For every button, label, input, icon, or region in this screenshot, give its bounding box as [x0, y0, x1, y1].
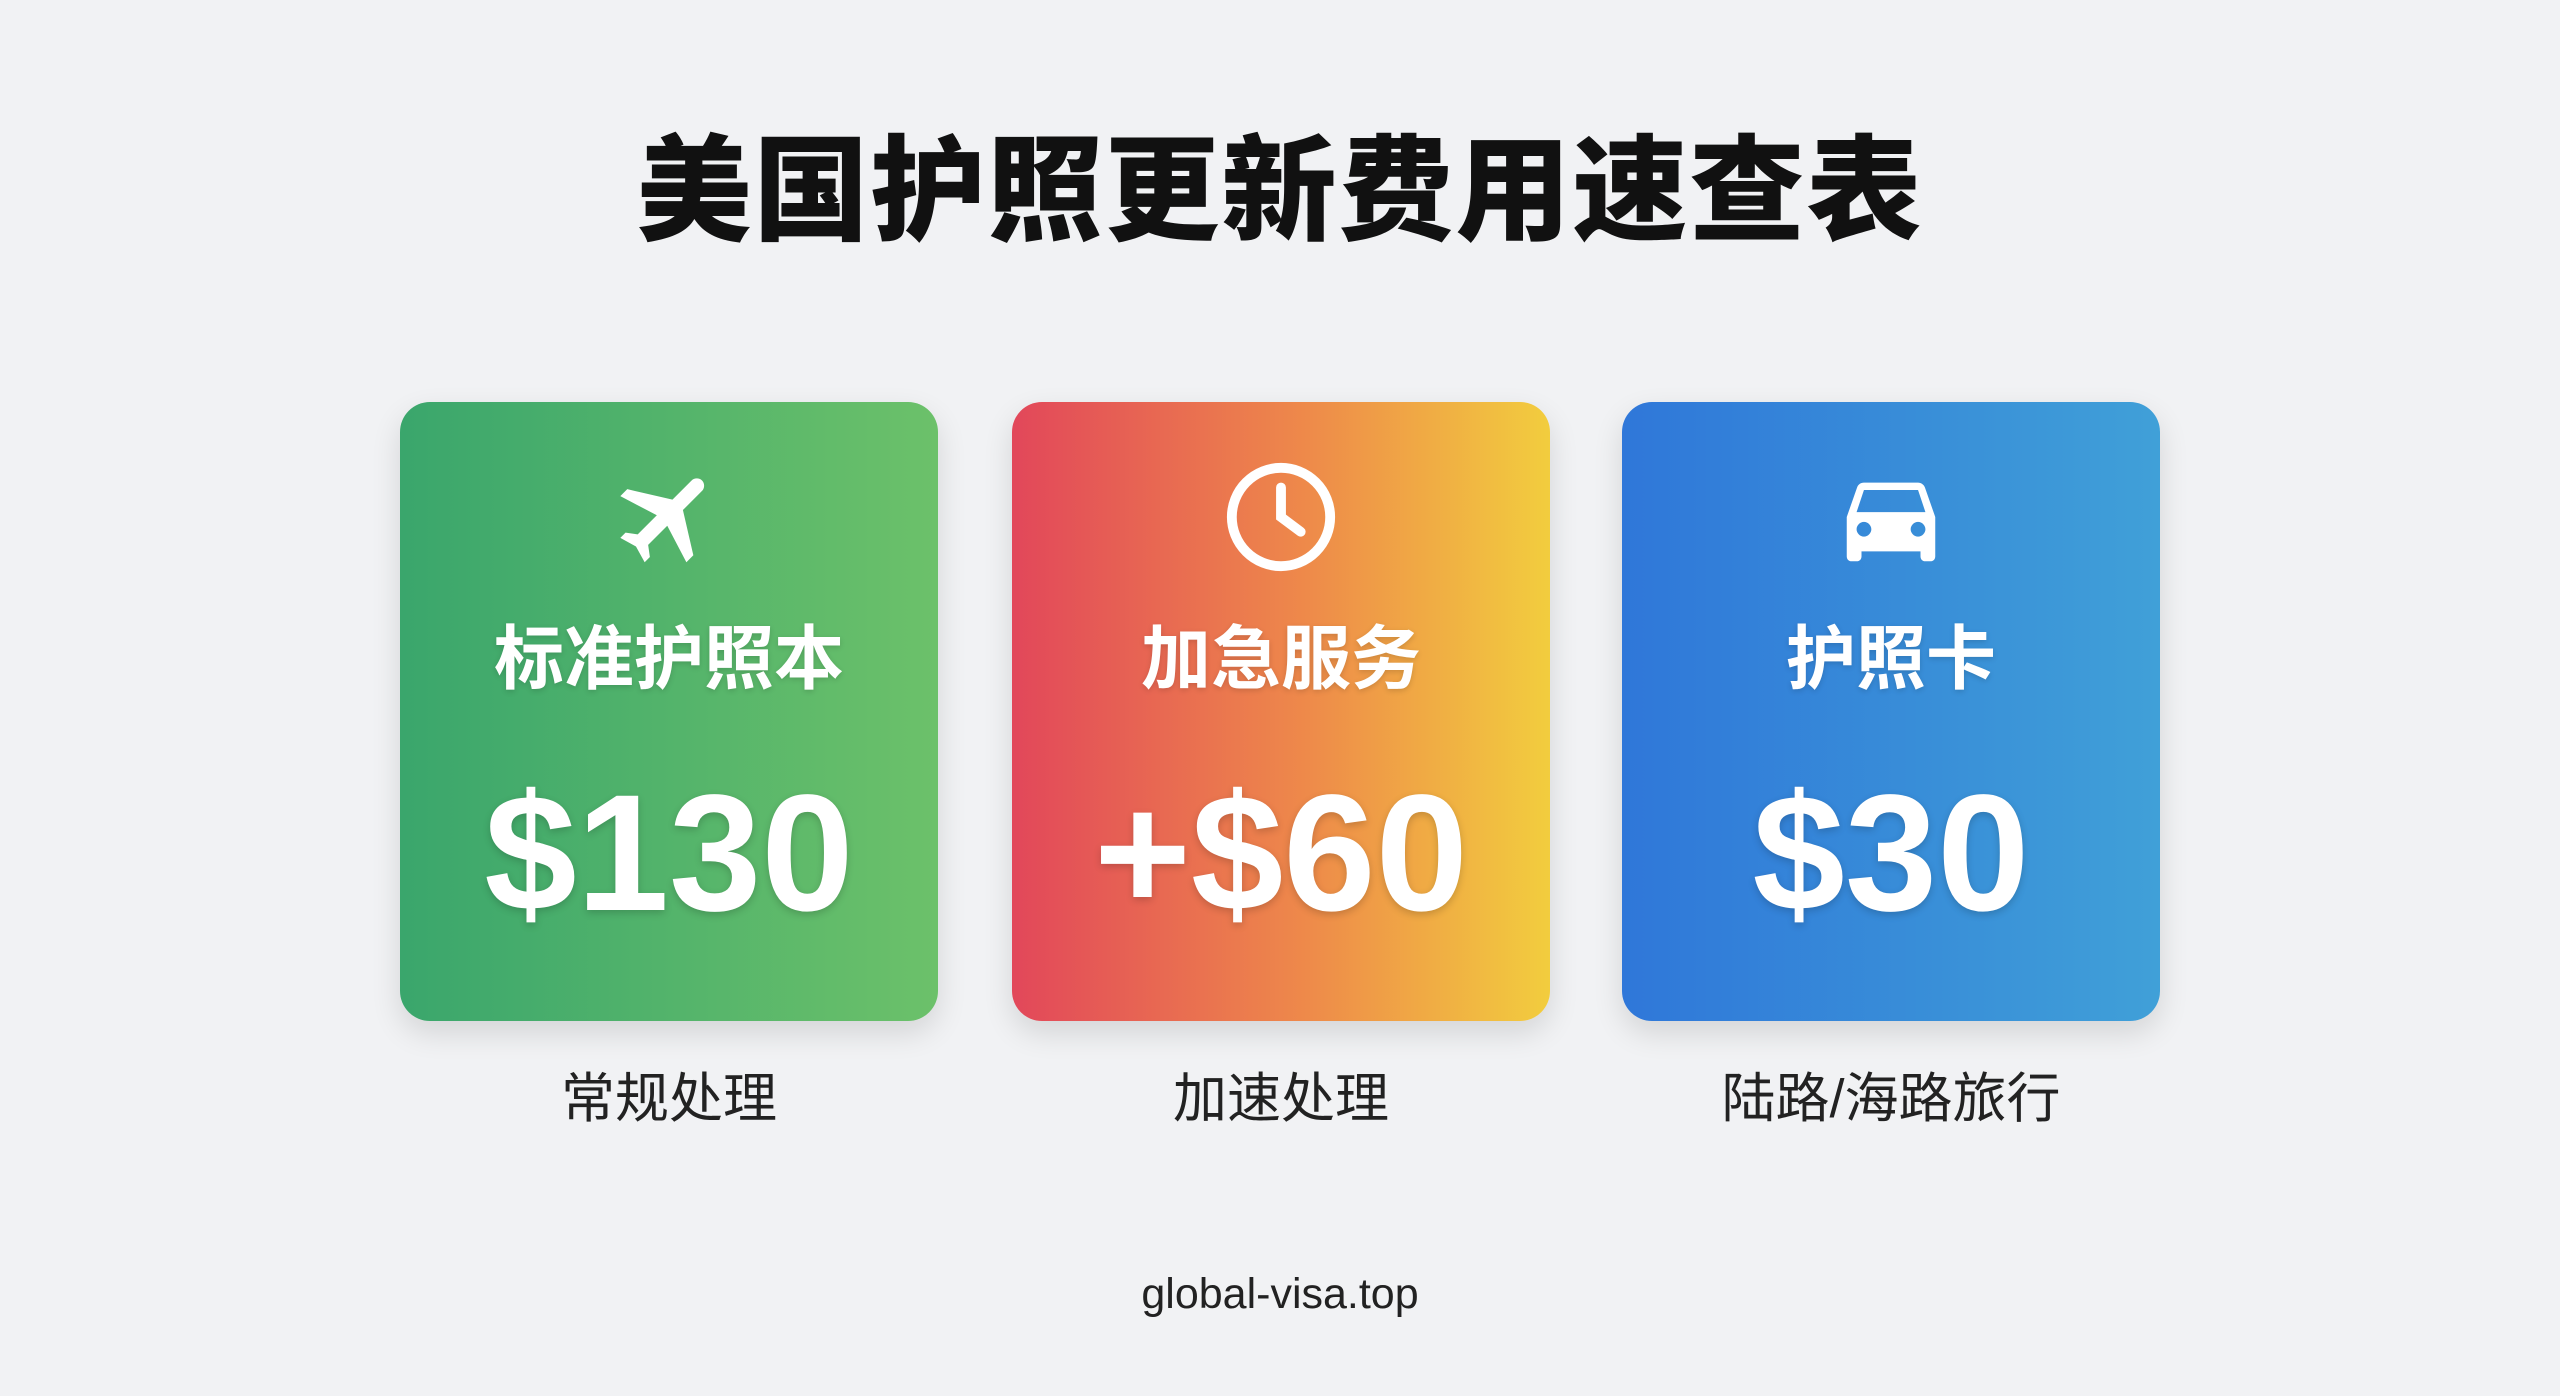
label: 护照卡 — [1786, 620, 1996, 698]
icon: car — [1846, 482, 1936, 562]
price: $130 — [484, 761, 854, 946]
panel: expedited — [1012, 402, 1550, 1021]
subtitle: land/sea: 陆路/海路旅行 — [1721, 1069, 2060, 1129]
panel: standard passport — [400, 402, 938, 1021]
price: $30 — [1753, 761, 2029, 946]
label: 标准护照本 — [494, 620, 844, 698]
footer: global-visa.top — [1141, 1270, 1419, 1318]
label: 加急服务 — [1141, 620, 1421, 698]
panel: passport card — [1622, 402, 2160, 1021]
icon: plane — [620, 478, 704, 562]
title: 美国护照更新费用速查表 — [636, 128, 1924, 256]
price: +$60 — [1094, 761, 1468, 946]
icon: clock — [1226, 462, 1336, 572]
subtitle: expedited: 加速处理 — [1173, 1069, 1389, 1129]
subtitle: regular: 常规处理 — [561, 1069, 777, 1129]
